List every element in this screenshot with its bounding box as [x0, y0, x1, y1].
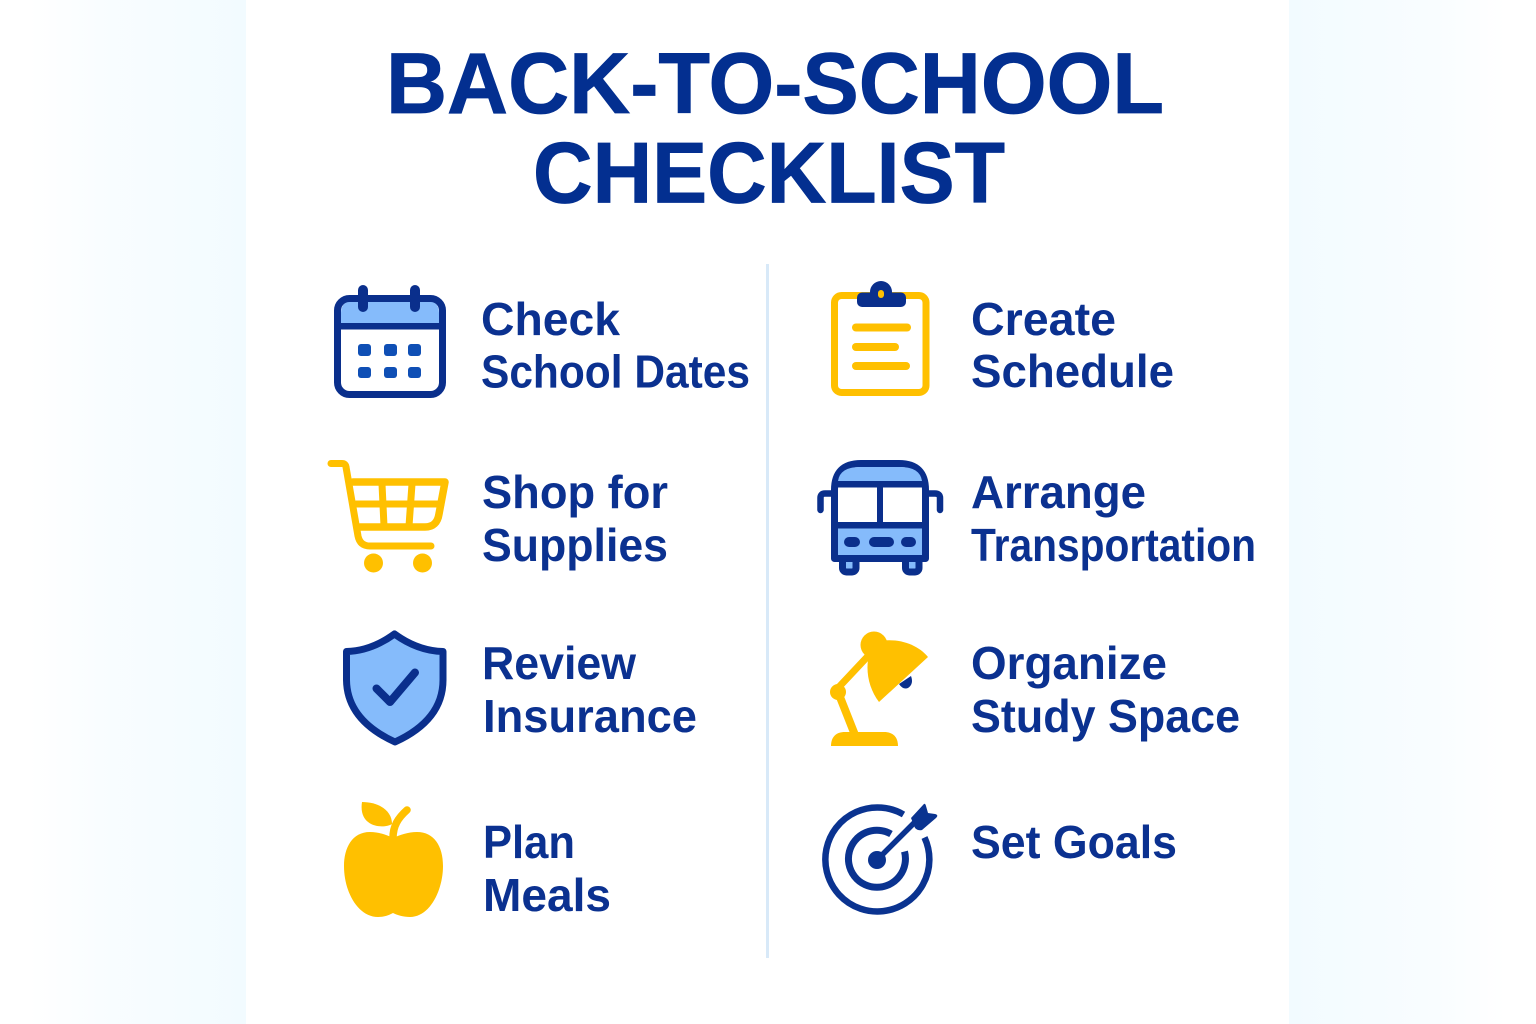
icon: shield with check [346, 634, 443, 742]
icon: calendar [338, 285, 442, 394]
label: Organize Study Space [971, 637, 1240, 742]
label: Check School Dates: School Dates [481, 346, 750, 398]
label: Review Insurance [482, 637, 697, 742]
label: Plan Meals [483, 816, 611, 921]
item: Organize Study Space [830, 632, 1240, 746]
item: Arrange Transportation [820, 464, 1256, 572]
icon: bus [820, 464, 940, 572]
label: Arrange Transportation: Arrange [971, 466, 1146, 518]
label: Shop for Supplies: Supplies [482, 519, 668, 571]
label: Organize Study Space: Organize [971, 637, 1167, 689]
item: Set Goals [825, 804, 1177, 911]
item: Review Insurance [346, 634, 697, 742]
label: Review Insurance: Insurance [483, 690, 697, 742]
label: Create Schedule: Schedule [971, 345, 1174, 397]
item: Shop for Supplies [331, 464, 668, 572]
label: Create Schedule [971, 293, 1174, 397]
title: BACK-TO-SCHOOL [386, 36, 1164, 132]
icon: clipboard [834, 281, 926, 392]
icon: target with arrow [825, 804, 937, 911]
item: Plan Meals [344, 802, 611, 921]
icon: shopping cart [331, 464, 445, 572]
label: Organize Study Space: Study Space [971, 690, 1240, 742]
label: Shop for Supplies: Shop for [482, 466, 668, 518]
label: Create Schedule: Create [971, 293, 1116, 345]
label: Check School Dates: Check [481, 293, 620, 345]
label: Arrange Transportation [971, 466, 1256, 571]
icon: desk lamp [830, 632, 928, 746]
label: Review Insurance: Review [482, 637, 636, 689]
label: Shop for Supplies [482, 466, 668, 571]
icon: apple [344, 802, 443, 917]
item: Create Schedule [834, 281, 1174, 397]
label: Check School Dates [481, 293, 750, 398]
label: Plan Meals: Meals [483, 869, 611, 921]
label: Arrange Transportation: Transportation [971, 519, 1256, 571]
label: Set Goals: Set Goals [971, 816, 1177, 868]
item: Check School Dates [338, 285, 750, 398]
label: Plan Meals: Plan [483, 816, 575, 868]
title: CHECKLIST [533, 126, 1005, 222]
title [386, 36, 1164, 222]
